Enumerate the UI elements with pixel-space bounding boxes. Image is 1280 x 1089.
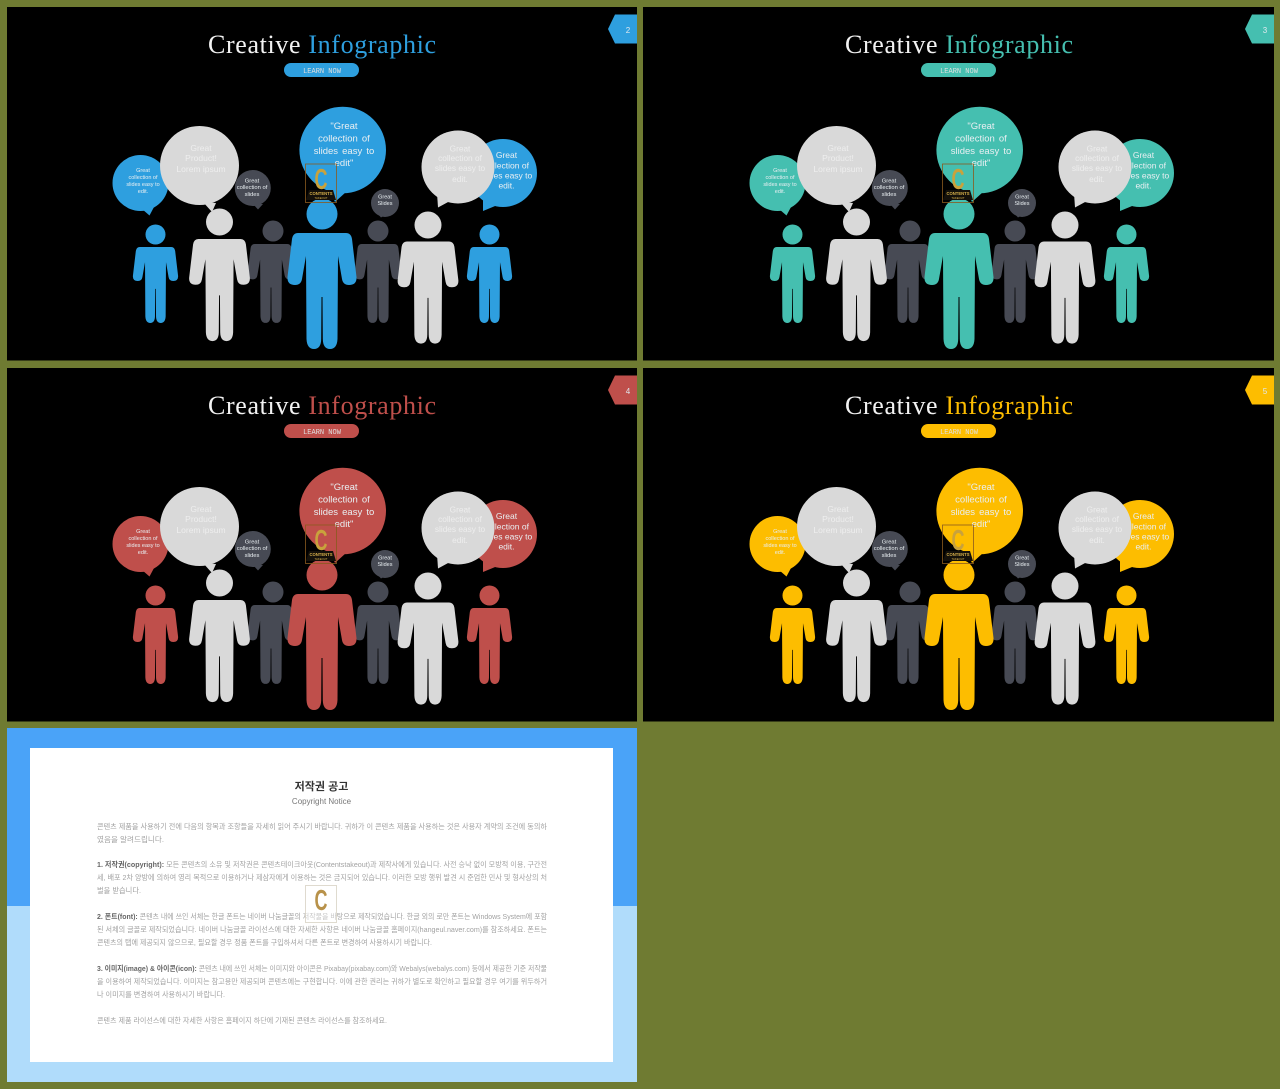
bubble: centre: "Great [967,121,995,132]
notice section 3: 3. 이미지(image) & 아이콘(icon): 콘텐츠 내에 쓰인 서체는 이미지와 아이콘은 Pixabay(pixabay.com)와 Webalys(webalys.com) 등에서 제공한 기준 저작물 [97,963,547,973]
bubble: grey left [160,487,239,573]
bubble: small left: edit. [775,189,786,195]
panel: teal slide [643,7,1274,360]
button: learn now: LEARN NOW [940,68,979,76]
bubble: small left: Great [773,529,787,535]
bubble: centre: collection of [955,134,1007,144]
bubble: grey left: Product! [185,153,217,163]
bubble: red right [469,500,537,572]
notice section 2: 된 서체의 글꼴로 제작되었습니다. 네이버 나눔글꼴 라이선스에 대한 자세한 사항은 네이버 나눔글꼴 홈페이지(hangeul.naver.com)를 참조하세요. 폰트는 [97,924,547,934]
notice footer line: 콘텐츠 제품 라이선스에 대한 자세한 사항은 홈페이지 하단에 기재된 콘텐츠 라이선스를 참조하세요. [97,1015,387,1025]
bubble: small left: collection of [128,536,158,542]
watermark logo: CONTENTS [310,191,333,196]
bubble: dark left: slides [882,553,897,559]
bubble: grey left: Great [190,504,212,514]
watermark logo: CONTENTS [946,191,970,196]
person: grey right [398,572,458,705]
bubble: small left: edit. [138,189,149,195]
panel: copyright notice [7,728,637,1082]
bubble: grey right: collection of [438,153,483,163]
watermark logo: CONTENTS [310,552,333,557]
person: centre [287,198,357,349]
bubble: dark left: slides [882,192,897,198]
bubble: grey right [422,492,494,568]
bubble: small left [112,155,168,216]
bubble: small left: collection of [765,175,795,181]
bubble: centre: collection of [955,494,1007,506]
notice section 2 [97,911,547,947]
person: grey right [1035,572,1095,705]
bubble: centre: edit" [335,158,353,169]
notice section 2: 콘텐츠의 탭에 제공되지 않으므로, 필요할 경우 정품 폰트를 구입하셔서 다른 폰트로 변경하여 사용하시기 바랍니다. [97,937,432,947]
button: learn now: LEARN NOW [940,429,979,437]
bubble: teal right: edit. [1135,180,1152,190]
bubble: grey left: Lorem ipsum [176,164,226,174]
button: learn now [284,63,359,77]
watermark logo: C [952,164,964,196]
bubble: grey right [1058,492,1132,568]
bubble: dark right: Slides [1015,562,1030,568]
bubble: dark right: Great [1015,556,1029,562]
person: small right [1104,224,1149,323]
bubble: dark left: collection of [874,185,905,191]
person: dark left [248,220,294,323]
bubble: blue right: edit. [498,180,515,190]
page tag: 3 [1263,26,1268,35]
watermark logo: C [952,525,964,557]
notice section 1: 벌을 받습니다. [97,885,141,895]
bubble: dark right: Great [378,556,392,562]
bubble: blue right: Great [496,150,518,160]
person: small left [133,586,178,684]
watermark logo [306,525,336,564]
bubble: grey right: slides easy to [1072,163,1123,173]
person: centre [924,198,994,349]
bubble: dark left [235,170,271,210]
watermark logo: C [315,885,327,917]
button: learn now [921,424,996,438]
bubble: dark right [371,189,399,218]
bubble: dark left: collection of [874,546,905,552]
person: grey left [826,570,887,702]
bubble: small left: Great [136,168,150,174]
bubble: blue right: collection of [484,160,530,170]
person: dark right [992,582,1038,684]
notice section 3 [97,963,547,999]
bubble: centre: "Great [967,482,995,493]
bubble: teal right: Great [1133,150,1155,160]
notice section 2: 2. 폰트(font): 콘텐츠 내에 쓰인 서체는 한글 폰트는 네이버 나눔글꼴의 저작물을 바탕으로 제작되었습니다. 한글 외의 로만 폰트는 Windows System에 포함 [97,911,547,921]
bubble: grey right: Great [450,504,471,514]
person: dark right [992,220,1038,323]
bubble: dark right [1008,550,1036,578]
bubble: grey left [797,487,876,573]
bubble: grey right: edit. [1089,174,1105,184]
page tag: 4 [626,387,631,396]
bubble: red right: collection of [484,522,530,532]
page tag [1245,376,1274,404]
person: centre [287,560,357,710]
bubble: grey right: edit. [452,174,468,184]
bubble: grey left: Product! [822,153,854,163]
bubble: dark right: Slides [1015,201,1030,207]
bubble: dark left: Great [245,178,260,184]
watermark logo: TAKEOUT [314,196,328,200]
person: small right [467,586,512,684]
bubble: dark right: Great [378,194,392,200]
panel: yellow slide [643,368,1274,722]
watermark logo [306,164,336,202]
bubble: small left: Great [773,168,787,174]
bubble: red right: slides easy to [481,532,533,542]
bubble: yellow right: collection of [1121,522,1167,532]
bubble: red right: edit. [498,542,515,552]
notice section 1: 세, 배포 2차 양방에 의하여 영리 목적으로 이용하거나 제삼자에게 이용하는 것은 금지되어 있습니다. 이러한 모방 행위 발견 시 준엄한 민사 및 형사상의 처 [97,872,547,882]
person: small left [770,586,815,684]
bubble: grey left: Lorem ipsum [813,525,863,535]
person: dark left [885,582,931,684]
person: grey left [189,208,250,341]
bubble: centre: slides easy to [314,146,374,157]
person: dark right [355,220,401,323]
bubble: grey left [797,126,876,212]
bubble: yellow right: slides easy to [1118,532,1170,542]
bubble: grey right: collection of [438,514,483,524]
bubble: centre: "Great [330,121,358,132]
notice subheading: Copyright Notice [292,797,352,806]
panel: red slide [7,368,637,722]
watermark logo [942,525,974,564]
bubble: grey left: Lorem ipsum [176,525,226,535]
title: Creative Infographic [845,30,1073,59]
bubble: blue right [469,139,537,211]
person: small left [770,224,815,323]
title: Creative Infographic [208,30,436,59]
bubble: grey right: Great [450,144,471,154]
notice section 3: 나 이미지를 변경하여 사용하시기 바랍니다. [97,989,225,999]
bubble: grey right: slides easy to [1072,524,1123,534]
bubble: red right: Great [496,511,518,521]
bubble: grey right [422,130,494,208]
bubble: small left: Great [136,529,150,535]
bubble: dark left [872,170,908,210]
bubble: yellow right: Great [1133,511,1155,521]
bubble: centre [936,468,1023,563]
notice heading: 저작권 공고 [295,779,348,793]
bubble: yellow right: edit. [1135,542,1152,552]
bubble: small left: edit. [138,550,149,556]
bubble: grey left: Great [827,504,849,514]
bubble: grey right [1058,130,1132,208]
bubble: small left [112,516,168,576]
bubble: small left [750,516,806,576]
bubble: centre: slides easy to [951,507,1011,518]
watermark logo: C [315,164,327,196]
watermark logo [306,885,336,922]
person: dark right [355,582,401,684]
bubble: centre: collection of [318,134,370,144]
button: learn now: LEARN NOW [303,68,342,76]
bubble: grey left [160,126,239,212]
bubble: blue right: slides easy to [481,170,533,180]
person: small right [1104,586,1149,684]
page tag [608,14,637,44]
bubble: dark left: slides [245,192,260,198]
bubble: small left [750,155,806,216]
person: small left [133,224,178,323]
notice section 1 [97,859,547,895]
panel: blue slide [7,7,637,360]
bubble: small left: slides easy to [126,182,160,188]
bubble: dark right: Great [1015,194,1029,200]
bubble: centre [299,468,386,563]
bubble: dark left: collection of [237,185,268,191]
notice intro: 였음을 알려드립니다. [97,834,164,844]
watermark logo: C [315,525,327,557]
bubble: centre [299,107,386,202]
watermark logo: TAKEOUT [951,557,965,561]
bubble: dark left: slides [245,553,260,559]
bubble: centre [936,107,1023,202]
bubble: centre: collection of [318,494,370,506]
notice section 3: 을 이용하여 제작되었습니다. 이미지는 참고용만 제공되며 콘텐츠에는 구현합니다. 이에 관한 권리는 귀하가 별도로 확인하고 필요할 경우 여기를 위두하거 [97,976,547,986]
bubble: yellow right [1106,500,1174,572]
bubble: grey left: Great [827,143,849,153]
bubble: dark right [371,550,399,578]
person: small right [467,224,512,323]
bubble: small left: collection of [765,536,795,542]
title: Creative Infographic [845,391,1073,420]
bubble: small left: edit. [775,550,786,556]
bubble: dark right: Slides [378,562,393,568]
bubble: dark left [235,531,271,570]
bubble: centre: slides easy to [951,146,1011,157]
bubble: centre: edit" [972,519,990,530]
bubble: grey right: collection of [1075,153,1120,163]
person: grey right [398,212,458,344]
page tag: 2 [626,26,631,35]
bubble: grey left: Great [190,143,212,153]
bubble: dark left: Great [882,178,897,184]
notice section 1: 1. 저작권(copyright): 모든 콘텐츠의 소유 및 저작권은 콘텐츠테이크아웃(Contentstakeout)과 제작사에게 있습니다. 사전 승낙 없이 모방적 이용, 구간전 [97,859,547,869]
bubble: dark left: Great [882,540,897,546]
bubble: grey right: Great [1087,144,1108,154]
bubble: grey right: edit. [1089,535,1105,545]
button: learn now [921,63,996,77]
bubble: centre: "Great [330,482,358,493]
bubble: centre: slides easy to [314,507,374,518]
bubble: centre: edit" [972,158,990,169]
bubble: small left: collection of [128,175,158,181]
bubble: grey left: Product! [185,514,217,524]
bubble: teal right [1106,139,1174,211]
person: dark left [885,220,931,323]
title: Creative Infographic [208,391,436,420]
bubble: dark right [1008,189,1036,218]
page tag [1245,14,1274,44]
bubble: dark right: Slides [378,201,393,207]
bubble: grey right: slides easy to [435,163,486,173]
watermark logo: CONTENTS [946,552,970,557]
bubble: centre: edit" [335,519,353,530]
bubble: dark left [872,531,908,570]
button: learn now [284,424,359,438]
button: learn now: LEARN NOW [303,429,342,437]
person: grey left [189,570,250,702]
bubble: grey right: Great [1087,504,1108,514]
watermark logo: TAKEOUT [951,196,965,200]
bubble: dark left: collection of [237,546,268,552]
bubble: small left: slides easy to [763,543,797,549]
watermark logo: TAKEOUT [314,557,328,561]
notice intro: 콘텐츠 제품을 사용하기 전에 다음의 항목과 조항들을 자세히 읽어 주시기 바랍니다. 귀하가 이 콘텐츠 제품을 사용하는 것은 사용자 계약의 조건에 동의하 [97,821,547,831]
bubble: small left: slides easy to [763,182,797,188]
page tag [608,376,637,404]
notice intro [97,821,547,844]
bubble: grey left: Product! [822,514,854,524]
page tag: 5 [1263,387,1268,396]
person: grey right [1035,212,1095,344]
bubble: grey right: collection of [1075,514,1120,524]
bubble: grey right: edit. [452,535,468,545]
bubble: grey left: Lorem ipsum [813,164,863,174]
bubble: small left: slides easy to [126,543,160,549]
bubble: teal right: collection of [1121,160,1167,170]
person: centre [924,560,994,710]
bubble: grey right: slides easy to [435,524,486,534]
person: dark left [248,582,294,684]
person: grey left [826,208,887,341]
bubble: dark left: Great [245,540,260,546]
watermark logo [942,164,974,202]
bubble: teal right: slides easy to [1118,170,1170,180]
